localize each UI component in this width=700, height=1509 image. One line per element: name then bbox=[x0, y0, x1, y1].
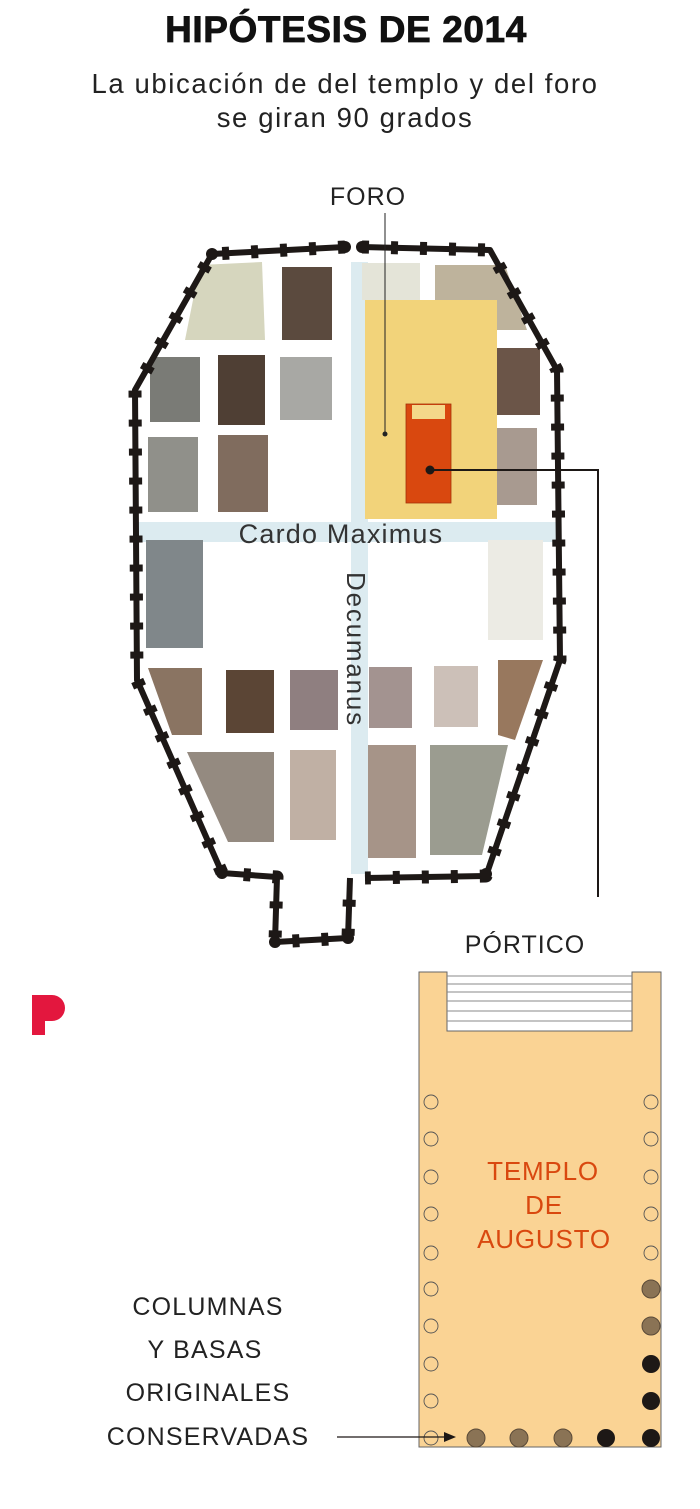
temple plan bbox=[419, 972, 661, 1447]
label FORO: FORO bbox=[330, 183, 406, 211]
label FORO bbox=[330, 183, 406, 436]
arrow bbox=[337, 1432, 456, 1442]
label columnas: COLUMNAS bbox=[132, 1293, 284, 1321]
map: Decumanus bbox=[341, 572, 371, 727]
city blocks bbox=[146, 262, 543, 858]
subtitle: se giran 90 grados bbox=[217, 102, 473, 133]
city walls bbox=[135, 247, 560, 942]
subtitle: La ubicación de del templo y del foro bbox=[91, 68, 599, 99]
logo P bbox=[32, 995, 65, 1035]
label columnas: CONSERVADAS bbox=[107, 1423, 309, 1451]
callout line to temple bbox=[426, 466, 598, 897]
label columnas: Y BASAS bbox=[148, 1336, 262, 1364]
temple plan: TEMPLO bbox=[487, 1156, 599, 1186]
temple small bbox=[406, 404, 451, 503]
label PORTICO: PÓRTICO bbox=[465, 930, 585, 959]
forum bbox=[365, 300, 497, 519]
temple plan: DE bbox=[525, 1190, 563, 1220]
title: HIPÓTESIS DE 2014 bbox=[165, 9, 527, 50]
roads bbox=[138, 262, 558, 874]
temple plan: AUGUSTO bbox=[477, 1224, 611, 1254]
label columnas bbox=[107, 1293, 309, 1451]
subtitle bbox=[91, 68, 599, 133]
label columnas: ORIGINALES bbox=[126, 1379, 290, 1407]
road labels: Cardo Maximus bbox=[239, 519, 443, 549]
